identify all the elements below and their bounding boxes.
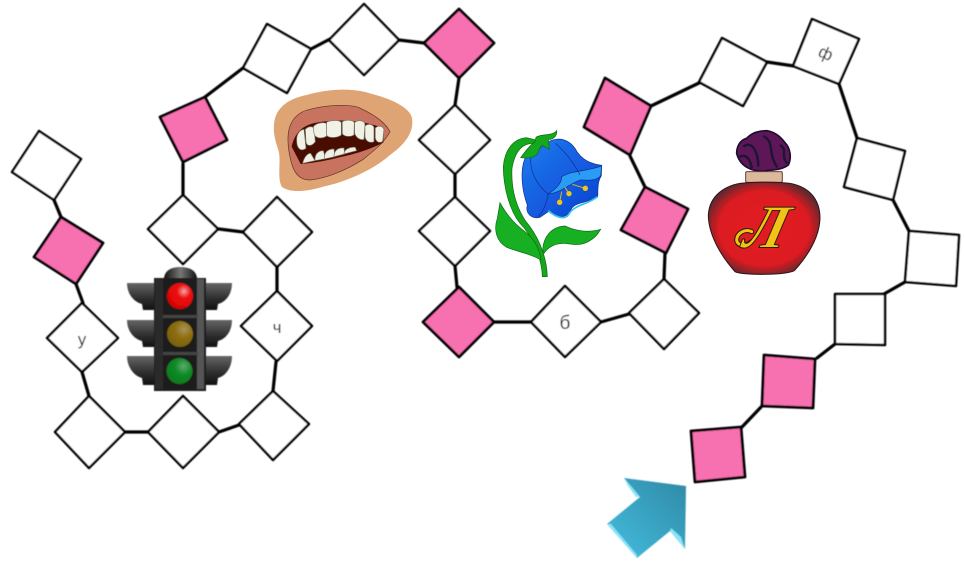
- cell 13: pink: [424, 9, 494, 78]
- icon: traffic light: [127, 267, 232, 391]
- bottle neck: [746, 172, 782, 182]
- connector lines between cells: [54, 39, 909, 432]
- arrow: blue start arrow: [607, 478, 686, 558]
- cell 19: pink: [621, 187, 688, 253]
- bell petals: [522, 139, 602, 218]
- cell 6: white: [239, 391, 309, 460]
- cell 26: pink: [762, 355, 815, 408]
- cell 9: white: [148, 195, 218, 264]
- cell 15: white: [419, 197, 490, 266]
- cell 23: white: [844, 138, 905, 200]
- script letter Л: Л: [735, 192, 800, 261]
- cell 3: letter у: у: [78, 330, 87, 349]
- icon: bluebell flower: [496, 131, 602, 277]
- cell 11: white: [243, 24, 311, 93]
- cell 24: white: [905, 231, 959, 286]
- cell 10: pink: [160, 97, 227, 162]
- cell 8: white: [243, 197, 312, 267]
- stem: [503, 138, 547, 277]
- bottle cap: [737, 131, 790, 171]
- upper teeth: [297, 120, 384, 150]
- cell 25: white: [835, 294, 885, 345]
- cell 21: white: [699, 38, 767, 106]
- left leaf: [496, 203, 541, 260]
- stamens: [560, 184, 585, 202]
- icon: perfume bottle: [708, 131, 820, 274]
- cell 14: white: [419, 105, 490, 174]
- cell 27: pink: [691, 427, 745, 482]
- bottle body: [708, 182, 820, 274]
- cell 7: letter ч: ч: [273, 318, 281, 337]
- lower teeth: [303, 147, 357, 163]
- cell 7: letter ч: [241, 291, 312, 361]
- mouth cavity: [292, 120, 384, 164]
- lips: [288, 105, 390, 180]
- cell 22: letter ф: [793, 19, 859, 84]
- right leaf: [543, 226, 601, 253]
- cell 2: pink: [34, 217, 103, 284]
- cell 1: white: [12, 131, 81, 200]
- cell 12: white: [329, 4, 399, 75]
- cell 18: white: [629, 279, 699, 349]
- cell 17: letter б: [531, 286, 601, 357]
- cell 20: pink: [584, 78, 651, 155]
- cell 3: letter у: [47, 303, 118, 372]
- amber light: [167, 321, 193, 347]
- red light: [167, 283, 193, 309]
- cell 22: letter ф: ф: [816, 42, 836, 65]
- calyx: [521, 131, 557, 158]
- green light: [166, 358, 192, 384]
- cell 16: pink: [423, 287, 494, 357]
- cell 5: white: [148, 396, 219, 468]
- icon: mouth with teeth: [274, 90, 412, 191]
- cell 4: white: [55, 396, 125, 468]
- skin: [274, 90, 412, 191]
- cell 17: letter б: б: [560, 313, 571, 334]
